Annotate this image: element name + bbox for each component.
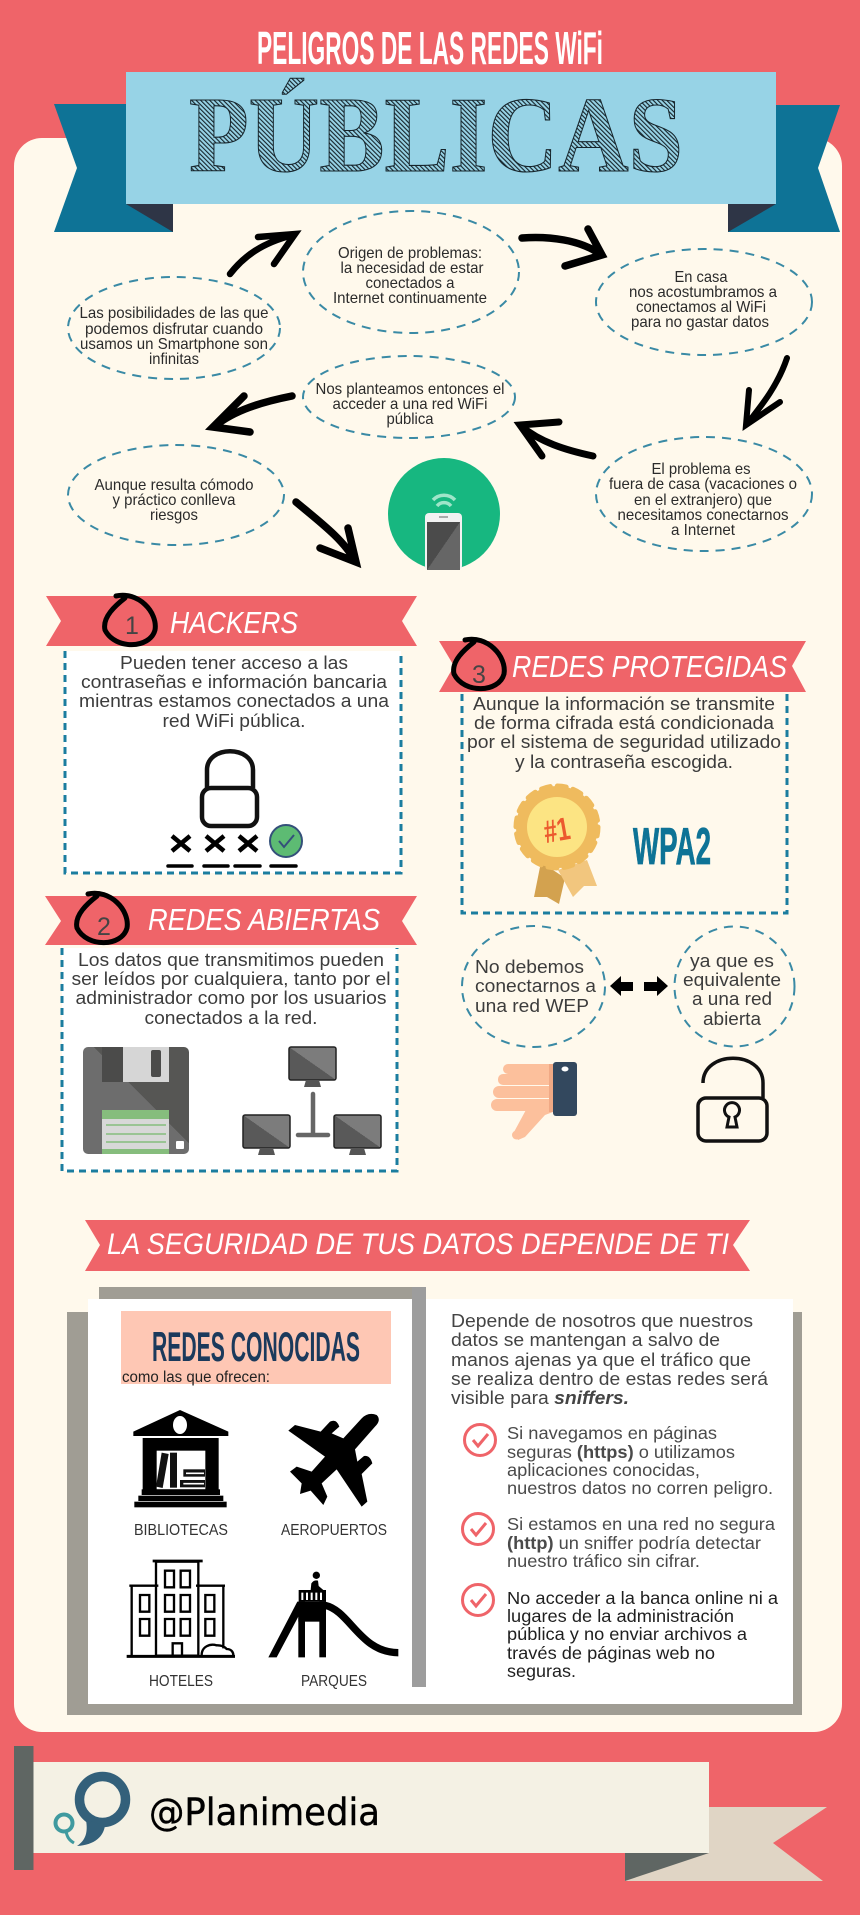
panel: redes protegidas [439, 639, 806, 913]
flow: bubble el problema: fuera de casa (vacaciones o [609, 476, 797, 493]
redes protegidas text: y la contraseña escogida. [515, 752, 733, 772]
text block: http [507, 1514, 775, 1571]
flow: bubble en casa: nos acostumbramos a [629, 284, 777, 301]
number 2 [77, 893, 127, 943]
text block: depende de nosotros: datos se mantengan a salvo de [451, 1330, 720, 1350]
text block: banca online: No acceder a la banca online ni a [507, 1588, 778, 1608]
redes protegidas ribbon [439, 641, 806, 692]
icon: library [133, 1410, 228, 1507]
flow: bubble origen de problemas: Origen de problemas: [338, 245, 482, 262]
panel: redes conocidas heading [121, 1311, 391, 1386]
redes protegidas box [462, 694, 787, 913]
flow: bubble en casa: conectamos al WiFi [636, 299, 766, 316]
text block: https: aplicaciones conocidas, [507, 1460, 700, 1480]
icon: airplane [288, 1414, 379, 1507]
flow: bubble posibilidades: Las posibilidades de las que [80, 305, 269, 322]
redes protegidas heading: REDES PROTEGIDAS [512, 649, 787, 684]
redes protegidas text [467, 694, 781, 772]
icon: padlock [202, 751, 257, 826]
hackers box [64, 651, 401, 873]
redes protegidas text: de forma cifrada está condicionada [474, 713, 775, 733]
icon: hotel [127, 1561, 235, 1656]
flow: bubble origen de problemas: la necesidad de estar [340, 260, 484, 277]
redes abiertas text: conectados a la red. [144, 1008, 318, 1028]
icon: check 2 [462, 1514, 494, 1544]
redes abiertas box [62, 948, 397, 1171]
banner: la seguridad de tus datos: LA SEGURIDAD DE TUS DATOS DEPENDE DE TI [107, 1228, 729, 1261]
flow: bubble aunque resulta comodo: y práctico conlleva [112, 492, 236, 509]
arrow: el problema to red publica [520, 422, 593, 456]
WPA2 label: WPA2 [633, 818, 711, 876]
hackers text: mientras estamos conectados a una [79, 691, 390, 711]
bubble: equivalente a red abierta: equivalente [683, 970, 781, 990]
icon: medal [516, 786, 598, 904]
redes abiertas text: ser leídos por cualquiera, tanto por el [72, 969, 390, 989]
arrow: aunque to smartphone [296, 502, 356, 562]
icon: floppy disk [83, 1047, 189, 1154]
icon: Planimedia logo [56, 1776, 126, 1846]
text block: banca online: seguras. [507, 1661, 576, 1681]
icon: computer network [243, 1047, 381, 1155]
icon: smartphone with wifi [388, 458, 500, 570]
footer ribbon [14, 1746, 827, 1881]
redes conocidas subtitle: como las que ofrecen: [122, 1369, 270, 1386]
hackers text: Pueden tener acceso a las [120, 653, 348, 673]
flow: bubble posibilidades: podemos disfrutar cuando [85, 321, 263, 338]
icon: check 1 [464, 1424, 496, 1456]
flow: bubble posibilidades [68, 277, 280, 379]
arrow: red publica to aunque [213, 396, 292, 432]
bubble: no debemos conectarnos: conectarnos a [475, 976, 597, 996]
flow: bubble red WiFi publica [303, 356, 515, 438]
label: parques: PARQUES [301, 1673, 367, 1690]
redes abiertas ribbon [45, 896, 417, 945]
text block: banca online [507, 1588, 778, 1681]
text block: https [507, 1423, 773, 1498]
text block: depende de nosotros: visible para sniffers. [451, 1388, 629, 1408]
flow: bubble red WiFi publica: pública [386, 411, 434, 428]
arrow: en casa to el problema [746, 358, 787, 425]
bubble: equivalente a red abierta: ya que es [690, 951, 774, 971]
label: aeropuertos: AEROPUERTOS [281, 1522, 387, 1539]
text block: http: Si estamos en una red no segura [507, 1514, 775, 1534]
flow: bubble el problema [596, 437, 812, 551]
text block: http: nuestro tráfico sin cifrar. [507, 1551, 700, 1571]
text block: https: Si navegamos en páginas [507, 1423, 717, 1443]
flow: bubble origen de problemas: conectados a [366, 275, 455, 292]
hackers ribbon [46, 596, 417, 646]
text block: banca online: través de páginas web no [507, 1643, 715, 1663]
text block: http: (http) un sniffer podría detectar [507, 1533, 761, 1553]
flow: bubble en casa [596, 249, 812, 355]
handle: @Planimedia [149, 1791, 380, 1834]
icon: password attempts [168, 825, 302, 866]
redes abiertas text [72, 950, 390, 1028]
hackers heading: HACKERS [170, 605, 298, 640]
label: bibliotecas: BIBLIOTECAS [134, 1522, 228, 1539]
hackers text: contraseñas e información bancaria [81, 672, 388, 692]
icon: medal: #1 [541, 810, 573, 850]
flow: bubble posibilidades: usamos un Smartphone son [80, 336, 268, 353]
panel: security frame [67, 1287, 802, 1715]
text block: depende de nosotros: manos ajenas ya que el tráfico que [451, 1350, 751, 1370]
flow: bubble el problema: a Internet [671, 522, 736, 539]
hackers text [79, 653, 390, 731]
redes protegidas text: por el sistema de seguridad utilizado [467, 732, 781, 752]
text block: banca online: lugares de la administración [507, 1606, 734, 1626]
flow: bubble aunque resulta comodo: Aunque resulta cómodo [94, 477, 254, 494]
number 2: 2 [97, 913, 111, 941]
label: hoteles: HOTELES [149, 1673, 213, 1690]
redes abiertas text: Los datos que transmitimos pueden [78, 950, 384, 970]
flow: bubble el problema: necesitamos conectarnos [618, 507, 788, 524]
flow: bubble aunque resulta comodo: riesgos [150, 507, 198, 524]
title ribbon [54, 72, 840, 232]
bubble: no debemos conectarnos [462, 926, 605, 1047]
flow: bubble en casa: para no gastar datos [631, 314, 769, 331]
text block: https: nuestros datos no corren peligro. [507, 1478, 773, 1498]
arrow: double arrow [610, 976, 668, 996]
bubble: no debemos conectarnos: No debemos [475, 957, 584, 977]
panel: hackers [46, 595, 417, 873]
text block: depende de nosotros [451, 1311, 769, 1408]
redes protegidas text: Aunque la información se transmite [473, 694, 775, 714]
icon: thumb down [491, 1062, 577, 1140]
hackers text: red WiFi pública. [162, 711, 306, 731]
flow: bubble aunque resulta comodo [68, 445, 284, 545]
flow: bubble origen de problemas: Internet continuamente [333, 290, 487, 307]
redes abiertas heading: REDES ABIERTAS [148, 902, 380, 937]
banner: la seguridad de tus datos [85, 1220, 750, 1271]
flow: bubble en casa: En casa [674, 269, 728, 286]
flow: bubble origen de problemas [303, 211, 519, 333]
icon: open padlock [698, 1058, 767, 1141]
icon: check 3 [462, 1584, 494, 1616]
flow: bubble red WiFi publica: acceder a una red WiFi [332, 396, 488, 413]
title: PÚBLICAS [189, 76, 683, 195]
flow: bubble el problema: El problema es [652, 461, 750, 478]
bubble: equivalente a red abierta: a una red [692, 989, 772, 1009]
arrow: origen to en casa [522, 229, 602, 266]
text block: depende de nosotros: Depende de nosotros que nuestros [451, 1311, 753, 1331]
flow: bubble el problema: en el extranjero) que [634, 492, 772, 509]
flow: bubble posibilidades: infinitas [149, 351, 199, 368]
bubble: no debemos conectarnos: una red WEP [475, 996, 589, 1016]
icon: playground slide [268, 1572, 398, 1657]
panel: redes abiertas [45, 893, 417, 1171]
number 1 [105, 595, 155, 645]
text block: https: seguras (https) o utilizamos [507, 1442, 735, 1462]
arrow: posibilidades to origen [230, 234, 295, 274]
redes conocidas title: REDES CONOCIDAS [152, 1323, 360, 1370]
text block: banca online: pública y no enviar archivos a [507, 1624, 747, 1644]
redes abiertas text: administrador como por los usuarios [76, 988, 386, 1008]
number 3 [454, 639, 504, 689]
number 1: 1 [125, 612, 139, 640]
bubble: equivalente a red abierta [674, 926, 794, 1046]
text block: depende de nosotros: se realiza dentro de estas redes será [451, 1369, 769, 1389]
number 3: 3 [472, 661, 486, 689]
bubble: equivalente a red abierta: abierta [703, 1009, 762, 1029]
flow: bubble red WiFi publica: Nos planteamos entonces el [316, 381, 504, 398]
